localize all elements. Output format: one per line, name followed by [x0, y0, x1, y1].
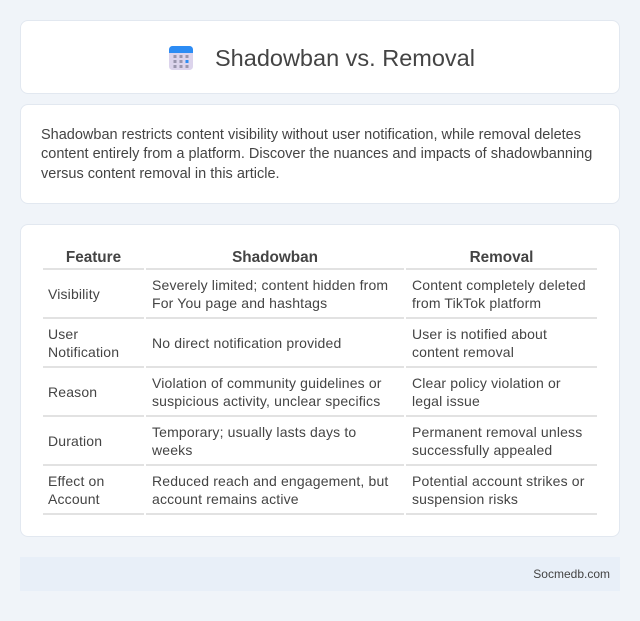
comparison table: Temporary; usually lasts days to	[152, 424, 356, 440]
comparison table: No direct notification provided	[152, 335, 341, 351]
intro text: content entirely from a platform. Discover the nuances and impacts of shadowbanning	[41, 146, 592, 162]
panel: comparison table card	[20, 224, 620, 537]
comparison table: User	[48, 326, 78, 342]
comparison table: legal issue	[412, 393, 480, 409]
panel: title card	[20, 20, 620, 94]
intro text: Shadowban restricts content visibility without user notification, while removal deletes	[41, 126, 581, 142]
comparison table: Permanent removal unless	[412, 424, 582, 440]
comparison table: Notification	[48, 344, 119, 360]
comparison table: suspicious activity, unclear specifics	[152, 393, 380, 409]
comparison table: Content completely deleted	[412, 277, 586, 293]
comparison table: Reason	[48, 384, 97, 400]
comparison table: content removal	[412, 344, 514, 360]
comparison table: Removal	[470, 248, 533, 266]
intro text	[41, 126, 592, 182]
comparison table: For You page and hashtags	[152, 295, 327, 311]
comparison table: Visibility	[48, 286, 100, 302]
comparison table: account remains active	[152, 491, 299, 507]
comparison table: Feature	[66, 248, 121, 266]
comparison table: suspension risks	[412, 491, 518, 507]
comparison table	[43, 248, 597, 515]
comparison table: weeks	[152, 442, 192, 458]
comparison table: Duration	[48, 433, 102, 449]
comparison table: Potential account strikes or	[412, 473, 585, 489]
title: Shadowban vs. Removal	[215, 45, 475, 71]
comparison table: Reduced reach and engagement, but	[152, 473, 388, 489]
panel: intro text card	[20, 104, 620, 204]
comparison table: Violation of community guidelines or	[152, 375, 382, 391]
icon: calendar	[169, 46, 193, 70]
comparison table: Effect on	[48, 473, 104, 489]
comparison table: Shadowban	[232, 248, 318, 266]
comparison table: User is notified about	[412, 326, 547, 342]
footer bar	[20, 557, 620, 591]
comparison table: successfully appealed	[412, 442, 552, 458]
comparison table: Clear policy violation or	[412, 375, 561, 391]
comparison table: Severely limited; content hidden from	[152, 277, 388, 293]
intro text: versus content removal in this article.	[41, 166, 280, 182]
footer text: Socmedb.com	[533, 567, 610, 581]
comparison table: from TikTok platform	[412, 295, 541, 311]
comparison table: Account	[48, 491, 100, 507]
